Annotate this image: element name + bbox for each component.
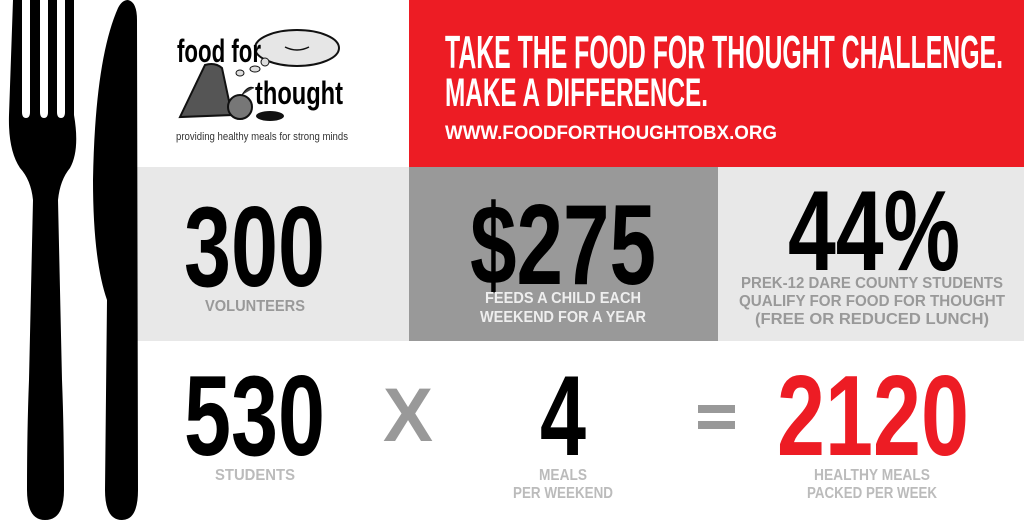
panel: percent	[718, 167, 1024, 341]
panel: percent: (FREE OR REDUCED LUNCH)	[755, 311, 989, 328]
number: $275: $275	[470, 182, 656, 309]
stat: 4 meals: PER WEEKEND	[513, 485, 613, 502]
stat: 2120 meals: 2120	[777, 353, 969, 480]
logo bag and apple	[180, 64, 284, 121]
label: prek-12: PREK-12 DARE COUNTY STUDENTS	[741, 275, 1003, 292]
operator: times: X	[383, 373, 433, 458]
heading: make a difference: MAKE A DIFFERENCE.	[445, 71, 708, 115]
panel: volunteers	[137, 167, 409, 341]
panel: cost	[409, 167, 718, 341]
text: website url: WWW.FOODFORTHOUGHTOBX.ORG	[445, 123, 777, 144]
panel: red header	[409, 0, 1024, 167]
stat: 4 meals: 4	[540, 353, 586, 480]
operator: equals	[698, 405, 735, 429]
number: 44%: 44%	[788, 168, 960, 295]
logo cloud	[236, 30, 339, 76]
panel: percent: QUALIFY FOR FOOD FOR THOUGHT	[739, 293, 1005, 310]
label: feeds a child: FEEDS A CHILD EACH	[485, 290, 641, 307]
icon: fork	[9, 0, 76, 520]
logo: food for thought	[176, 30, 348, 143]
icon: knife	[93, 0, 138, 520]
stat: 4 meals: MEALS	[539, 467, 587, 484]
stat: 530 students: 530	[184, 353, 325, 480]
panel: cost: WEEKEND FOR A YEAR	[480, 309, 646, 326]
logo text: food for	[177, 33, 261, 69]
tagline: providing healthy meals for strong minds	[176, 131, 348, 143]
stat: 530 students: STUDENTS	[215, 467, 295, 484]
stat: 2120 meals	[777, 353, 969, 502]
stat: 2120 meals: HEALTHY MEALS	[814, 467, 930, 484]
logo: food for thought: thought	[255, 75, 343, 111]
label: volunteers: VOLUNTEERS	[205, 298, 305, 315]
number: 300: 300	[184, 184, 325, 311]
stat: 4 meals	[513, 353, 613, 502]
stat: 2120 meals: PACKED PER WEEK	[807, 485, 937, 502]
